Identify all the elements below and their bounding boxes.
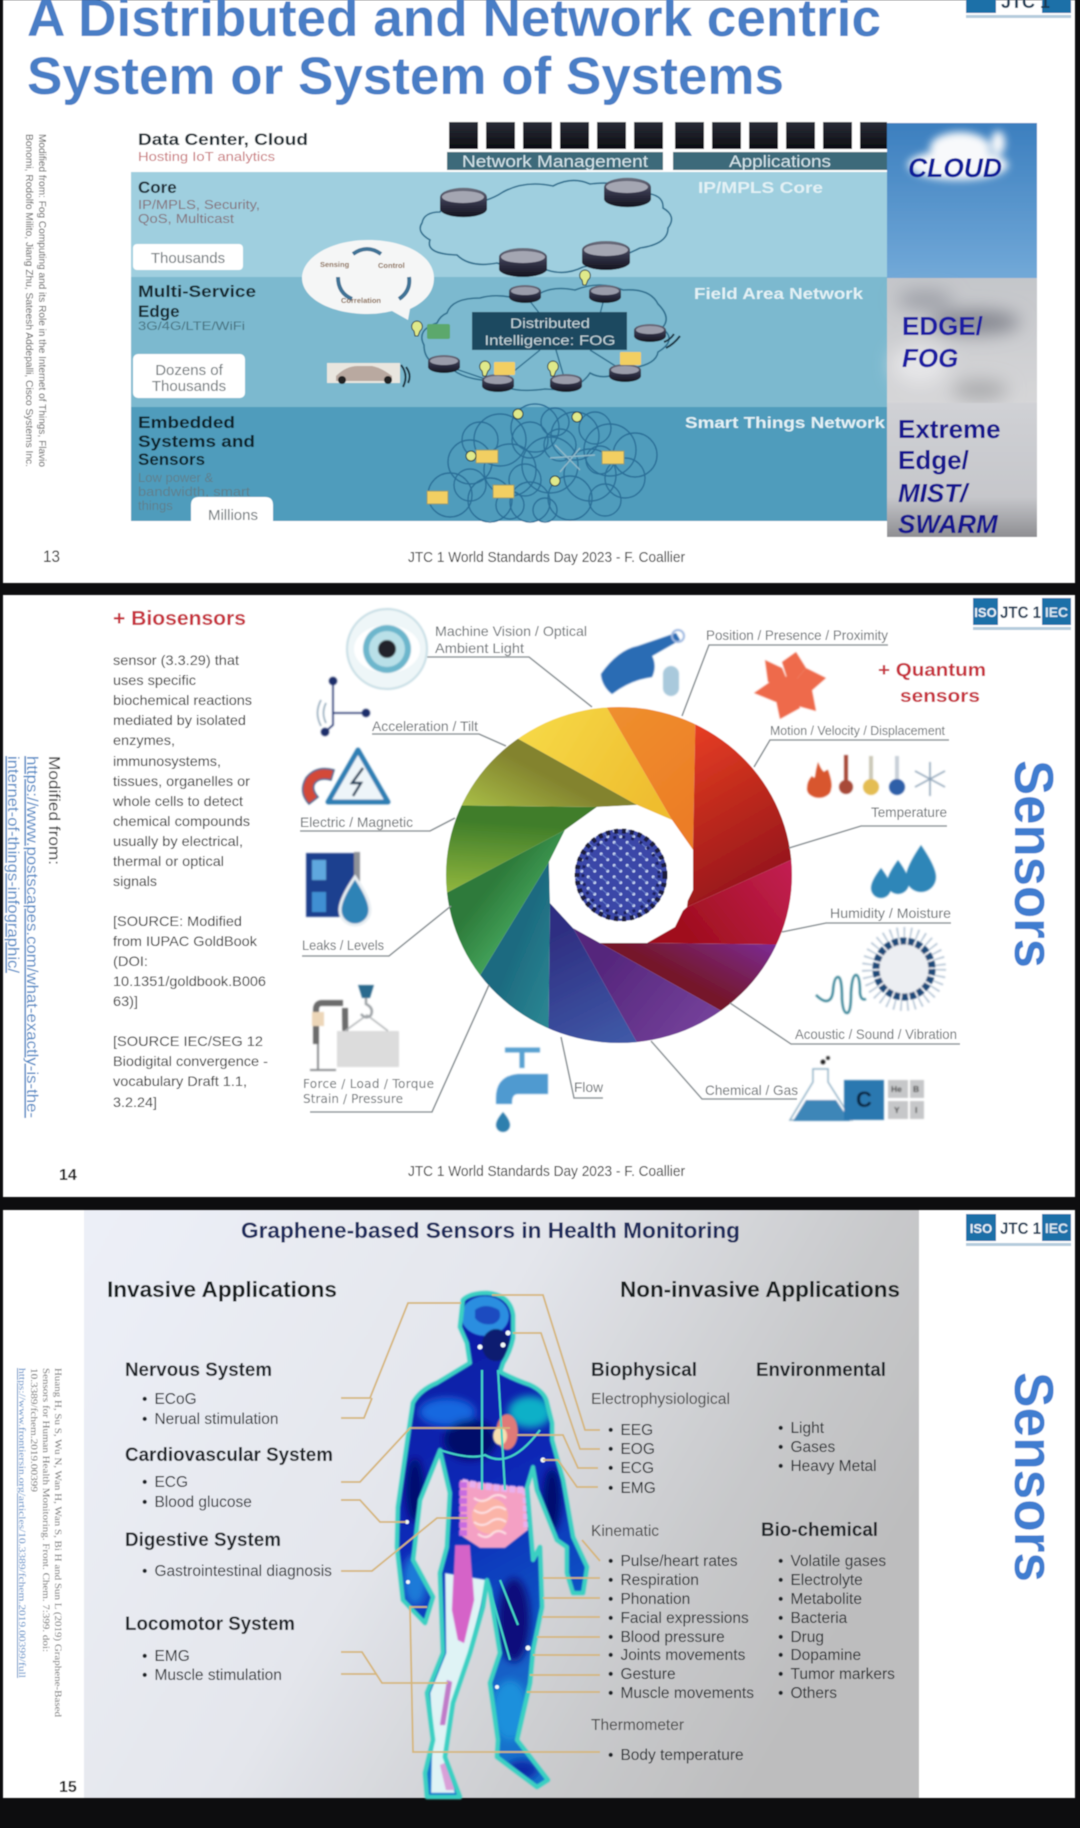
icon: flask and elements: B xyxy=(913,1084,919,1094)
nervous system: Nervous System xyxy=(125,1360,272,1381)
icon: graphene lattice xyxy=(575,829,667,921)
multi-service tier label xyxy=(138,282,256,333)
embedded tier label: bandwidth, smart xyxy=(138,484,250,499)
rotated citation: https://www.frontiersin.org/articles/10.3389/fchem.2019.00399/full xyxy=(16,1368,27,1678)
icon: car xyxy=(327,363,400,384)
icon: magnet and voltage triangle xyxy=(303,750,388,804)
rotated citation: 10.3389/fchem.2019.00399 xyxy=(28,1368,39,1492)
panel: extreme edge mist swarm: Extreme xyxy=(898,414,1001,444)
rotated source link xyxy=(4,756,62,1118)
logo: ISO JTC1 IEC: ISO xyxy=(974,605,997,620)
speech bubble: sensing control correlation: Sensing xyxy=(320,260,350,269)
tier network names: Field Area Network xyxy=(694,286,863,303)
logo: ISO JTC1 IEC xyxy=(966,1214,1071,1246)
section headings: Non-invasive Applications xyxy=(620,1277,900,1302)
bio-chemical column: • Volatile gases xyxy=(778,1553,886,1570)
distributed intelligence box: Intelligence: FOG xyxy=(484,332,616,348)
sensor labels: Temperature xyxy=(871,804,947,820)
biosensor definition text xyxy=(112,652,268,1110)
panel: edge fog: FOG xyxy=(902,343,958,373)
biosensor definition text: uses specific xyxy=(113,672,196,688)
core tier label: Core xyxy=(138,178,177,197)
icon: sound wave and burst xyxy=(816,933,940,1013)
sensor labels: Chemical / Gas xyxy=(705,1082,798,1098)
biosensor definition text: 3.2.24] xyxy=(113,1094,157,1110)
icon: fan blades xyxy=(754,652,826,719)
slide number: 13 xyxy=(43,547,60,566)
title: System or System of Systems xyxy=(27,47,784,106)
rotated source link: https://www.postscapes.com/what-exactly-is-the- xyxy=(23,756,40,1118)
dozens of thousands badge: Thousands xyxy=(152,378,226,395)
biophysical column: • Blood pressure xyxy=(608,1629,725,1646)
panel: extreme edge mist swarm: SWARM xyxy=(898,509,999,539)
icon: flask and elements xyxy=(790,1056,924,1121)
sensor labels: Position / Presence / Proximity xyxy=(706,627,888,643)
distributed intelligence box: Distributed xyxy=(510,315,590,331)
biophysical column xyxy=(591,1360,754,1764)
source note, rotated xyxy=(23,134,48,467)
footer: JTC 1 World Standards Day 2023 - F. Coallier xyxy=(408,1163,685,1180)
bio-chemical column xyxy=(761,1520,895,1702)
panel: extreme edge mist swarm xyxy=(887,403,1037,539)
bio-chemical column: Bio-chemical xyxy=(761,1520,878,1541)
panel: extreme edge mist swarm: MIST/ xyxy=(898,478,970,508)
vertical sensors label: Sensors xyxy=(1003,760,1065,968)
core tier label: IP/MPLS, Security, xyxy=(138,197,260,212)
embedded tier label: Systems and xyxy=(138,432,255,451)
panel: edge fog xyxy=(887,278,1037,403)
distributed intelligence box xyxy=(472,312,627,350)
biosensor definition text: 63)] xyxy=(113,993,138,1009)
icon: humidity drops xyxy=(871,845,936,898)
biosensor definition text: [SOURCE: Modified xyxy=(113,913,242,929)
biophysical column: • EMG xyxy=(608,1480,656,1497)
biosensor definition text: (DOI: xyxy=(113,953,148,969)
logo: ISO JTC1 IEC, cropped xyxy=(966,0,1071,18)
slide number: 14 xyxy=(59,1167,77,1184)
embedded tier label xyxy=(138,413,255,513)
cardiovascular system: Cardiovascular System xyxy=(125,1445,333,1466)
sensor labels: Acoustic / Sound / Vibration xyxy=(795,1026,957,1042)
icon: water tap xyxy=(496,1050,548,1132)
icon: flask and elements: C xyxy=(856,1087,872,1112)
biophysical column: • Facial expressions xyxy=(608,1610,749,1627)
tier network names xyxy=(685,180,885,432)
slide 15: graphene sensors xyxy=(3,1210,1075,1798)
millions badge xyxy=(191,497,273,524)
colour wheel chart xyxy=(445,706,793,1044)
muscle shading xyxy=(403,1396,561,1780)
section headings xyxy=(107,1277,900,1302)
nervous system: • ECoG xyxy=(142,1391,197,1408)
biosensor definition text: mediated by isolated xyxy=(113,712,246,728)
environmental column: • Heavy Metal xyxy=(778,1458,877,1475)
biosensors heading: + Biosensors xyxy=(113,608,246,630)
biosensor definition text: thermal or optical xyxy=(113,853,224,869)
biophysical column: • EOG xyxy=(608,1441,655,1458)
sensor labels: Machine Vision / Optical xyxy=(435,623,587,639)
biosensor definition text: biochemical reactions xyxy=(113,692,252,708)
smart things mesh network xyxy=(427,404,657,522)
tan connector lines xyxy=(341,1295,600,1752)
nervous system xyxy=(125,1360,278,1428)
biosensor definition text: enzymes, xyxy=(113,732,175,748)
icon: clamp and weight xyxy=(310,985,399,1070)
biosensor definition text: sensor (3.3.29) that xyxy=(113,652,239,668)
biophysical column: • Pulse/heart rates xyxy=(608,1553,738,1570)
heart xyxy=(493,1414,518,1450)
core cloud network xyxy=(420,178,672,277)
biosensor definition text: signals xyxy=(113,873,157,889)
lower leg muscle xyxy=(440,1680,452,1725)
speech bubble: sensing control correlation: Correlation xyxy=(341,296,381,305)
core tier label xyxy=(138,178,260,226)
bio-chemical column: • Electrolyte xyxy=(778,1572,863,1589)
server racks row xyxy=(449,122,887,149)
biophysical column: Electrophysiological xyxy=(591,1391,730,1408)
locomotor system xyxy=(125,1614,295,1684)
data center heading: Data Center, Cloud xyxy=(138,130,308,149)
biosensor definition text: vocabulary Draft 1.1, xyxy=(113,1073,247,1089)
intestines xyxy=(460,1480,528,1548)
multi-service tier label: 3G/4G/LTE/WiFi xyxy=(138,319,245,333)
sensor labels: Ambient Light xyxy=(435,640,524,656)
applications bar xyxy=(673,152,887,171)
icon: eye xyxy=(347,609,427,689)
panel: cloud sky xyxy=(887,123,1037,278)
panel: cloud sky: CLOUD xyxy=(908,153,1002,183)
source note, rotated: Modified from: Fog Computing and its Role in the Internet of Things, Flavio xyxy=(36,134,48,467)
biophysical column: • Joints movements xyxy=(608,1647,746,1664)
biosensor definition text: usually by electrical, xyxy=(113,833,243,849)
logo: ISO JTC1 IEC: IEC xyxy=(1045,604,1068,620)
section headings: Invasive Applications xyxy=(107,1277,337,1302)
icon: flask and elements: I xyxy=(915,1105,917,1115)
slide 14: sensors wheel xyxy=(3,595,1075,1197)
icon: temperature row xyxy=(807,755,945,798)
speech bubble: sensing control correlation xyxy=(302,240,434,320)
footer: JTC 1 World Standards Day 2023 - F. Coallier xyxy=(408,549,685,566)
invasive applications lists xyxy=(125,1360,333,1684)
biophysical column: • Gesture xyxy=(608,1666,676,1683)
slide number: 15 xyxy=(59,1779,77,1796)
biosensor definition text: [SOURCE IEC/SEG 12 xyxy=(113,1033,263,1049)
nervous system: • Nerual stimulation xyxy=(142,1411,278,1428)
sensor labels: Humidity / Moisture xyxy=(830,905,951,921)
logo: ISO JTC1 IEC xyxy=(973,598,1071,630)
icon: tank and drop xyxy=(306,852,370,925)
logo: ISO JTC1 IEC: JTC 1 xyxy=(1000,603,1041,622)
embedded tier label: Low power & xyxy=(138,470,213,485)
sensor labels: Motion / Velocity / Displacement xyxy=(770,724,946,738)
biosensor definition text: tissues, organelles or xyxy=(113,773,250,789)
body nerve highlights xyxy=(440,1370,540,1660)
biophysical column: • Respiration xyxy=(608,1572,699,1589)
multi-service tier label: Edge xyxy=(138,302,180,321)
quantum sensors callout: sensors xyxy=(900,685,980,706)
vertical sensors label: Sensors xyxy=(1003,1372,1065,1582)
environmental column: • Gases xyxy=(778,1439,835,1456)
embedded tier label: things xyxy=(138,498,173,513)
panel: extreme edge mist swarm: Edge/ xyxy=(898,445,969,475)
biosensor definition text: chemical compounds xyxy=(113,813,250,829)
sensor labels: Flow xyxy=(574,1079,604,1095)
environmental column: Environmental xyxy=(756,1360,886,1381)
body teal outline xyxy=(397,1293,587,1797)
biophysical column: • Phonation xyxy=(608,1591,690,1608)
biophysical column: Thermometer xyxy=(591,1717,684,1734)
tier network names: IP/MPLS Core xyxy=(698,180,823,197)
thousands badge xyxy=(133,244,243,270)
environmental column xyxy=(756,1360,886,1475)
title xyxy=(27,0,881,106)
sensor labels: Electric / Magnetic xyxy=(300,814,413,830)
cardiovascular system: • ECG xyxy=(142,1474,188,1491)
cardiovascular system: • Blood glucose xyxy=(142,1494,252,1511)
human body figure xyxy=(397,1293,587,1797)
logo: ISO JTC1 IEC: IEC xyxy=(1045,1220,1068,1236)
quantum sensors callout: + Quantum xyxy=(878,659,986,680)
bio-chemical column: • Dopamine xyxy=(778,1647,861,1664)
icon: accelerometer axes xyxy=(318,678,370,736)
biophysical column: Biophysical xyxy=(591,1360,697,1381)
rotated citation: Huang H, Su S, Wu N, Wan H, Wan S, Bi H and Sun L (2019) Graphene-Based xyxy=(52,1368,63,1717)
source note, rotated: Bonomi, Rodolfo Milito, Jiang Zhu, Sateesh Addepalli, Cisco Systems Inc. xyxy=(23,134,35,467)
applications bar: Applications xyxy=(729,152,831,171)
slide 13: distributed system xyxy=(3,0,1075,583)
sensor dots on body xyxy=(405,1330,546,1689)
data center heading xyxy=(138,130,308,164)
biophysical column: • ECG xyxy=(608,1460,654,1477)
digestive system xyxy=(125,1530,332,1580)
biosensor definition text: immunosystems, xyxy=(113,753,221,769)
multi-service tier label: Multi-Service xyxy=(138,282,256,301)
rotated citation: Sensors for Human Health Monitoring. Front. Chem. 7:399. doi: xyxy=(40,1368,51,1652)
sensor labels xyxy=(300,623,957,1106)
embedded tier label: Embedded xyxy=(138,413,235,432)
environmental column: • Light xyxy=(778,1420,825,1437)
left leg light tissue xyxy=(430,1573,487,1793)
locomotor system: • EMG xyxy=(142,1648,190,1665)
biophysical column: • EEG xyxy=(608,1422,653,1439)
speech bubble: sensing control correlation: Control xyxy=(378,261,405,270)
locomotor system: Locomotor System xyxy=(125,1614,295,1635)
icon: pointing finger xyxy=(601,630,684,696)
thousands badge: Thousands xyxy=(151,250,225,267)
rotated source link: internet-of-things-infographic/ xyxy=(4,756,21,974)
panel: health monitoring background xyxy=(84,1210,919,1798)
biosensor definition text: Biodigital convergence - xyxy=(113,1053,268,1069)
data center heading: Hosting IoT analytics xyxy=(138,149,276,164)
panel: edge fog: EDGE/ xyxy=(902,311,983,341)
slide title: Graphene-based Sensors in Health Monitoring xyxy=(241,1218,740,1243)
digestive system: Digestive System xyxy=(125,1530,281,1551)
network management bar: Network Management xyxy=(462,152,648,171)
bio-chemical column: • Bacteria xyxy=(778,1610,848,1627)
core tier label: QoS, Multicast xyxy=(138,211,234,226)
panel: tier bands xyxy=(131,172,887,521)
thigh muscle xyxy=(452,1545,474,1643)
embedded tier label: Sensors xyxy=(138,450,205,469)
sensor connector lines xyxy=(300,645,960,1112)
tier network names: Smart Things Network xyxy=(685,415,885,432)
millions badge: Millions xyxy=(208,507,258,524)
fog cloud network xyxy=(401,270,680,392)
sensor labels: Strain / Pressure xyxy=(303,1092,403,1106)
rotated source link: Modified from: xyxy=(45,756,62,865)
sensor labels: Leaks / Levels xyxy=(302,937,384,953)
biosensor definition text: 10.1351/goldbook.B006 xyxy=(113,973,266,989)
rotated citation xyxy=(16,1368,63,1717)
icon: flask and elements: He xyxy=(891,1084,902,1094)
biosensor definition text: from IUPAC GoldBook xyxy=(113,933,258,949)
dozens of thousands badge: Dozens of xyxy=(155,362,224,379)
quantum sensors callout xyxy=(878,659,986,706)
digestive system: • Gastrointestinal diagnosis xyxy=(142,1563,332,1580)
sensor labels: Acceleration / Tilt xyxy=(372,718,478,734)
bio-chemical column: • Others xyxy=(778,1685,837,1702)
sensor labels: Force / Load / Torque xyxy=(303,1077,434,1091)
biophysical column: • Muscle movements xyxy=(608,1685,754,1702)
cardiovascular system xyxy=(125,1445,333,1511)
wheel white centre xyxy=(549,805,693,943)
logo: ISO JTC1 IEC: ISO xyxy=(970,1221,992,1236)
logo: ISO JTC1 IEC: JTC 1 xyxy=(1000,1219,1041,1238)
bio-chemical column: • Metabolite xyxy=(778,1591,862,1608)
biophysical column: Kinematic xyxy=(591,1523,659,1540)
icon: flask and elements: Y xyxy=(894,1105,900,1115)
locomotor system: • Muscle stimulation xyxy=(142,1667,282,1684)
head and brain xyxy=(461,1296,510,1361)
bio-chemical column: • Drug xyxy=(778,1629,824,1646)
biosensor definition text: whole cells to detect xyxy=(112,793,243,809)
biophysical column: • Body temperature xyxy=(608,1747,744,1764)
bio-chemical column: • Tumor markers xyxy=(778,1666,895,1683)
dozens of thousands badge xyxy=(133,354,245,398)
